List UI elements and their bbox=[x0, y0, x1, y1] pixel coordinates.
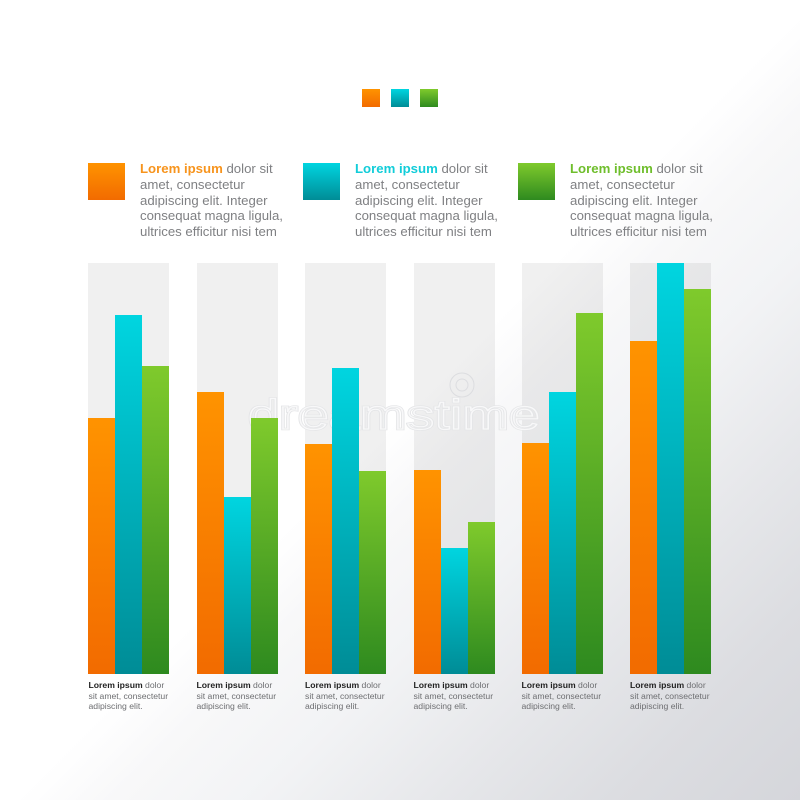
legend squares bbox=[362, 89, 438, 107]
green bar bbox=[251, 418, 278, 674]
icon: orange key bbox=[88, 163, 125, 200]
caption 1 bbox=[88, 680, 168, 711]
text block: orange: ultrices efficitur nisi tem bbox=[140, 224, 277, 239]
text block: green: consequat magna ligula, bbox=[570, 208, 713, 223]
caption 3: Lorem ipsum dolor bbox=[305, 680, 381, 690]
text block: cyan: amet, consectetur bbox=[355, 177, 460, 192]
bar group 3 bbox=[305, 263, 386, 674]
text block: green: adipiscing elit. Integer bbox=[570, 192, 698, 208]
orange bar bbox=[522, 443, 549, 674]
caption 2: sit amet, consectetur bbox=[196, 691, 276, 701]
caption 3: adipiscing elit. bbox=[305, 701, 359, 711]
orange bar bbox=[88, 418, 115, 674]
icon: cyan key bbox=[303, 163, 340, 200]
text block: cyan bbox=[355, 161, 498, 239]
caption 5: adipiscing elit. bbox=[522, 701, 576, 711]
caption 6 bbox=[630, 680, 710, 711]
text block: cyan: ultrices efficitur nisi tem bbox=[355, 224, 492, 239]
bar group 2 bbox=[197, 263, 278, 674]
icon: orange square bbox=[362, 89, 380, 107]
icon: cyan square bbox=[391, 89, 409, 107]
caption 4: Lorem ipsum dolor bbox=[414, 680, 489, 690]
text block: orange: Lorem ipsum dolor sit bbox=[140, 161, 273, 176]
orange bar bbox=[305, 444, 332, 674]
text block: cyan: adipiscing elit. Integer bbox=[355, 192, 483, 208]
caption 3 bbox=[305, 680, 385, 711]
caption 2: Lorem ipsum dolor bbox=[196, 680, 272, 690]
caption 6: Lorem ipsum dolor bbox=[630, 680, 706, 690]
caption 4: adipiscing elit. bbox=[414, 701, 468, 711]
text block: orange: adipiscing elit. Integer bbox=[140, 192, 268, 208]
caption 2: adipiscing elit. bbox=[196, 701, 251, 711]
green bar bbox=[576, 313, 603, 674]
cyan bar bbox=[115, 315, 142, 674]
bar group 1 bbox=[88, 263, 169, 674]
green bar bbox=[684, 289, 711, 674]
text block: orange: amet, consectetur bbox=[140, 177, 245, 192]
caption 5: Lorem ipsum dolor bbox=[522, 680, 597, 690]
green bar bbox=[468, 522, 495, 674]
bar group 5 bbox=[522, 263, 603, 674]
text block: green bbox=[570, 161, 713, 239]
caption 2 bbox=[196, 680, 276, 711]
caption 5 bbox=[522, 680, 601, 711]
cyan bar bbox=[657, 263, 684, 674]
text block: cyan: Lorem ipsum dolor sit bbox=[355, 161, 488, 176]
bar group 4 bbox=[414, 263, 495, 674]
watermark: dreamstime bbox=[248, 391, 540, 438]
text block: green: ultrices efficitur nisi tem bbox=[570, 224, 707, 239]
watermark: dreamstime bbox=[248, 391, 540, 438]
orange bar bbox=[197, 392, 224, 674]
caption 6: adipiscing elit. bbox=[630, 701, 684, 711]
green bar bbox=[142, 366, 169, 674]
text block: green: amet, consectetur bbox=[570, 177, 675, 192]
caption 4 bbox=[414, 680, 493, 711]
text block: orange bbox=[140, 161, 283, 239]
caption 5: sit amet, consectetur bbox=[522, 691, 601, 701]
icon: green square bbox=[420, 89, 438, 107]
orange bar bbox=[414, 470, 441, 674]
caption 4: sit amet, consectetur bbox=[414, 691, 493, 701]
green bar bbox=[359, 471, 386, 674]
caption 3: sit amet, consectetur bbox=[305, 691, 385, 701]
caption 1: adipiscing elit. bbox=[88, 701, 143, 711]
caption 6: sit amet, consectetur bbox=[630, 691, 710, 701]
cyan bar bbox=[224, 497, 251, 674]
orange bar bbox=[630, 341, 657, 674]
bar group 6 bbox=[630, 263, 711, 674]
text block: orange: consequat magna ligula, bbox=[140, 208, 283, 223]
text block: green: Lorem ipsum dolor sit bbox=[570, 161, 703, 176]
cyan bar bbox=[332, 368, 359, 674]
caption 1: sit amet, consectetur bbox=[88, 691, 168, 701]
watermark bbox=[248, 372, 540, 438]
cyan bar bbox=[549, 392, 576, 674]
caption 1: Lorem ipsum dolor bbox=[88, 680, 164, 690]
cyan bar bbox=[441, 548, 468, 674]
icon: green key bbox=[518, 163, 555, 200]
text block: cyan: consequat magna ligula, bbox=[355, 208, 498, 223]
